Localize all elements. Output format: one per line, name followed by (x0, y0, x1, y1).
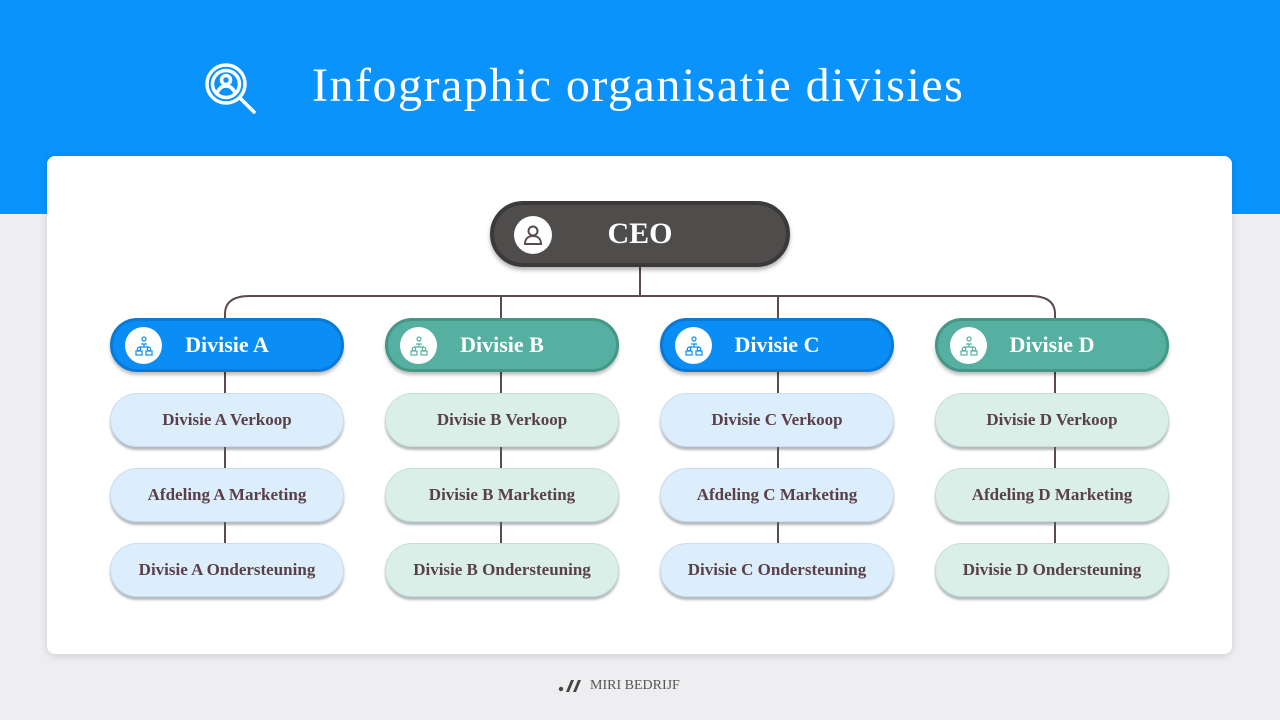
sub: Ondersteuning (935, 543, 1169, 597)
sub: Verkoop: Divisie D Verkoop (986, 410, 1118, 429)
Divisie C header: Divisie C (735, 332, 819, 357)
sub: Ondersteuning: Divisie A Ondersteuning (139, 560, 315, 579)
Divisie A header (110, 318, 344, 372)
sub: Ondersteuning (385, 543, 619, 597)
sub: Ondersteuning (110, 543, 344, 597)
sub: Verkoop: Divisie B Verkoop (437, 410, 567, 429)
sub: Marketing (110, 468, 344, 522)
header band (0, 0, 1280, 214)
title: Infographic organisatie divisies (312, 59, 964, 112)
sub: Verkoop (660, 393, 894, 447)
CEO box: CEO (607, 217, 672, 250)
Divisie C header (660, 318, 894, 372)
icon: logo (558, 680, 581, 692)
footer brand: MIRI BEDRIJF (590, 678, 680, 693)
column: Divisie D (934, 318, 1170, 602)
Divisie D header (935, 318, 1169, 372)
panel: org chart card (47, 156, 1232, 654)
column: Divisie A (108, 318, 346, 602)
icon: magnifier person (205, 63, 256, 114)
sub: Verkoop (110, 393, 344, 447)
column: Divisie B (384, 318, 620, 602)
sub: Verkoop (385, 393, 619, 447)
sub: Ondersteuning (660, 543, 894, 597)
sub: Marketing (660, 468, 894, 522)
sub: Verkoop: Divisie A Verkoop (162, 410, 292, 429)
Divisie A header: Divisie A (185, 332, 269, 357)
sub: Marketing: Afdeling C Marketing (697, 485, 857, 504)
sub: Marketing: Divisie B Marketing (429, 485, 575, 504)
sub: Marketing: Afdeling D Marketing (972, 485, 1132, 504)
sub: Ondersteuning: Divisie D Ondersteuning (963, 560, 1141, 579)
sub: Marketing: Afdeling A Marketing (148, 485, 306, 504)
sub: Marketing (935, 468, 1169, 522)
CEO box (490, 201, 790, 267)
sub: Verkoop: Divisie C Verkoop (711, 410, 843, 429)
Divisie B header (385, 318, 619, 372)
sub: Ondersteuning: Divisie C Ondersteuning (688, 560, 866, 579)
icon: person (514, 216, 552, 254)
column: Divisie C (658, 318, 896, 602)
sub: Marketing (385, 468, 619, 522)
Divisie B header: Divisie B (460, 332, 544, 357)
Divisie D header: Divisie D (1010, 332, 1094, 357)
sub: Ondersteuning: Divisie B Ondersteuning (413, 560, 591, 579)
sub: Verkoop (935, 393, 1169, 447)
